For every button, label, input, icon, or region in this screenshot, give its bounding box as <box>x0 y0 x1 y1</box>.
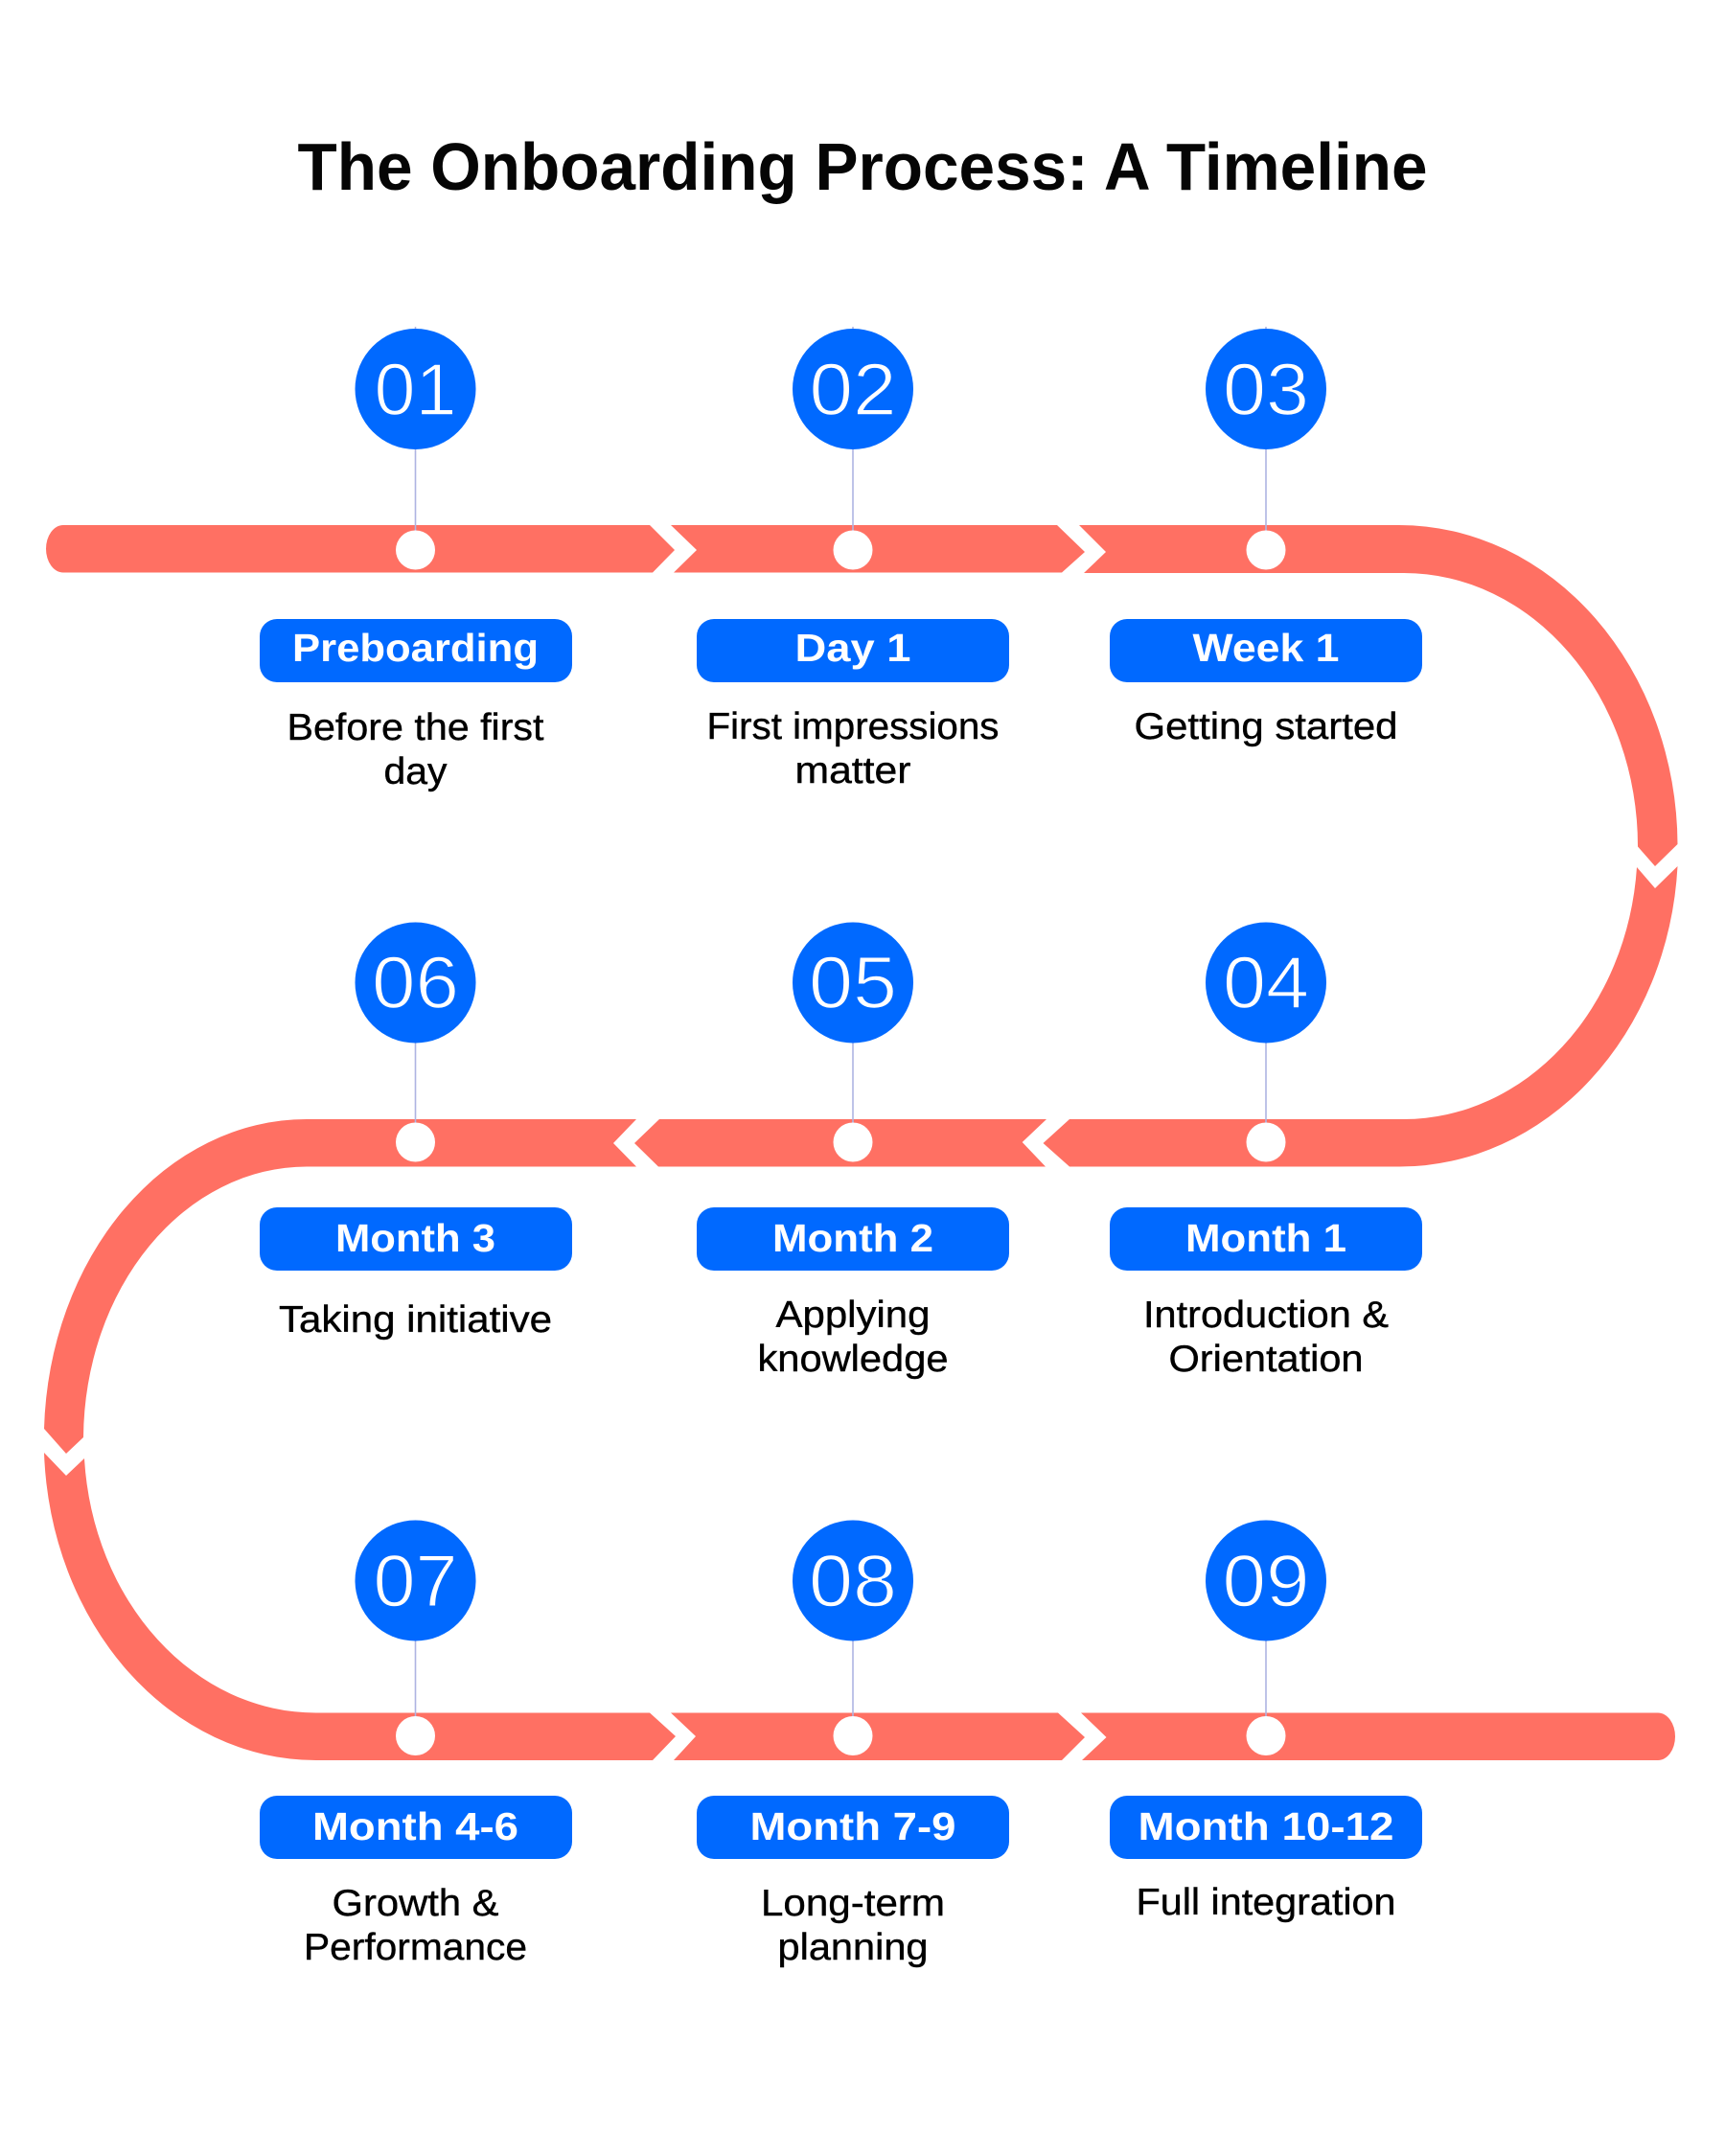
timeline dot 3 <box>1246 531 1286 569</box>
number badge 02 <box>793 329 913 449</box>
label pill: Month 2 <box>697 1207 1009 1271</box>
label pill: Preboarding <box>260 619 572 682</box>
ribbon segment 9 <box>1081 1713 1675 1760</box>
timeline dot 5 <box>834 1123 872 1161</box>
label pill: Month 7-9: Month 7-9 <box>749 1804 956 1848</box>
serpentine timeline ribbon <box>44 525 1677 1760</box>
timeline dot 4 <box>1246 1123 1286 1161</box>
description: Long-term planning <box>761 1883 945 1968</box>
label pill: Month 10-12: Month 10-12 <box>1138 1804 1393 1848</box>
label pill: Day 1 <box>697 619 1009 682</box>
description: First impressions matter: matter <box>795 750 911 791</box>
ribbon segment 8 <box>671 1713 1085 1760</box>
description: First impressions matter: First impressions <box>707 706 999 747</box>
label pill: Day 1: Day 1 <box>795 626 910 670</box>
description: Growth & Performance: Growth & <box>332 1883 498 1924</box>
description: Taking initiative: Taking initiative <box>279 1299 552 1341</box>
label pill: Month 1: Month 1 <box>1185 1216 1346 1260</box>
number badge 06: 06 <box>372 942 459 1024</box>
number badge 08: 08 <box>809 1541 897 1623</box>
number badge 08 <box>793 1520 913 1640</box>
label pill: Week 1 <box>1110 619 1422 682</box>
timeline dot 1 <box>396 531 435 569</box>
timeline dot 9 <box>1246 1716 1286 1755</box>
step 03: Week 1 <box>1110 327 1422 747</box>
number badge 09: 09 <box>1223 1541 1309 1623</box>
number badge 06 <box>355 922 475 1043</box>
step 02: Day 1 <box>697 327 1009 791</box>
label pill: Month 4-6 <box>260 1796 572 1859</box>
number badge 03 <box>1206 329 1326 449</box>
label pill: Month 7-9 <box>697 1796 1009 1859</box>
step 05: Month 2 <box>697 922 1009 1380</box>
ribbon segment 2 <box>671 525 1085 573</box>
description: Applying knowledge <box>757 1295 949 1380</box>
number badge 07 <box>355 1520 475 1640</box>
description: Introduction & Orientation <box>1143 1295 1389 1380</box>
number badge 01: 01 <box>374 349 456 431</box>
number badge 09 <box>1206 1520 1326 1640</box>
description: Growth & Performance: Performance <box>304 1927 527 1968</box>
number badge 04: 04 <box>1223 942 1309 1024</box>
ribbon segment 1 <box>46 525 675 573</box>
ribbon segment 7 with left lower curve <box>44 1453 676 1760</box>
number badge 01 <box>355 329 475 449</box>
ribbon segment 3 with right upper curve <box>1079 525 1677 866</box>
ribbon segment 5 <box>634 1119 1046 1167</box>
number badge 05 <box>793 922 913 1043</box>
label pill: Month 10-12 <box>1110 1796 1422 1859</box>
step 07: Month 4-6 <box>260 1520 572 1968</box>
number badge 07: 07 <box>374 1541 458 1623</box>
step 08: Month 7-9 <box>697 1520 1009 1968</box>
label pill: Week 1: Week 1 <box>1192 626 1340 670</box>
ribbon segment 4 with right lower curve <box>1043 866 1677 1167</box>
label pill: Month 4-6: Month 4-6 <box>312 1804 518 1848</box>
label pill: Month 2: Month 2 <box>772 1216 933 1260</box>
timeline dot 6 <box>396 1123 435 1161</box>
step 01: Preboarding <box>260 327 572 792</box>
label pill: Preboarding: Preboarding <box>292 626 539 670</box>
description: Introduction & Orientation: Orientation <box>1169 1339 1363 1380</box>
description: Before the first day <box>288 707 544 792</box>
timeline dot 7 <box>396 1716 435 1755</box>
description: First impressions matter <box>707 706 999 791</box>
title: The Onboarding Process: A Timeline <box>297 129 1428 204</box>
ribbon segment 6 with left upper curve <box>44 1119 636 1454</box>
description: Introduction & Orientation: Introduction & <box>1143 1295 1389 1336</box>
label pill: Month 3 <box>260 1207 572 1271</box>
description: Before the first day: Before the first <box>288 707 544 748</box>
number badge 05: 05 <box>809 942 897 1024</box>
number badge 02: 02 <box>809 349 897 431</box>
description: Before the first day: day <box>383 751 448 792</box>
description: Getting started: Getting started <box>1135 706 1397 747</box>
description: Long-term planning: planning <box>778 1927 928 1968</box>
number badge 03: 03 <box>1223 349 1309 431</box>
description: Full integration: Full integration <box>1137 1882 1395 1923</box>
step 06: Month 3 <box>260 922 572 1341</box>
step 09: Month 10-12 <box>1110 1520 1422 1923</box>
number badge 04 <box>1206 922 1326 1043</box>
description: Applying knowledge: knowledge <box>757 1339 949 1380</box>
timeline dot 2 <box>834 531 872 569</box>
timeline dot 8 <box>834 1716 872 1755</box>
description: Growth & Performance <box>304 1883 527 1968</box>
description: Applying knowledge: Applying <box>776 1295 930 1336</box>
label pill: Month 3: Month 3 <box>335 1216 495 1260</box>
label pill: Month 1 <box>1110 1207 1422 1271</box>
description: Long-term planning: Long-term <box>761 1883 945 1924</box>
step 04: Month 1 <box>1110 922 1422 1380</box>
